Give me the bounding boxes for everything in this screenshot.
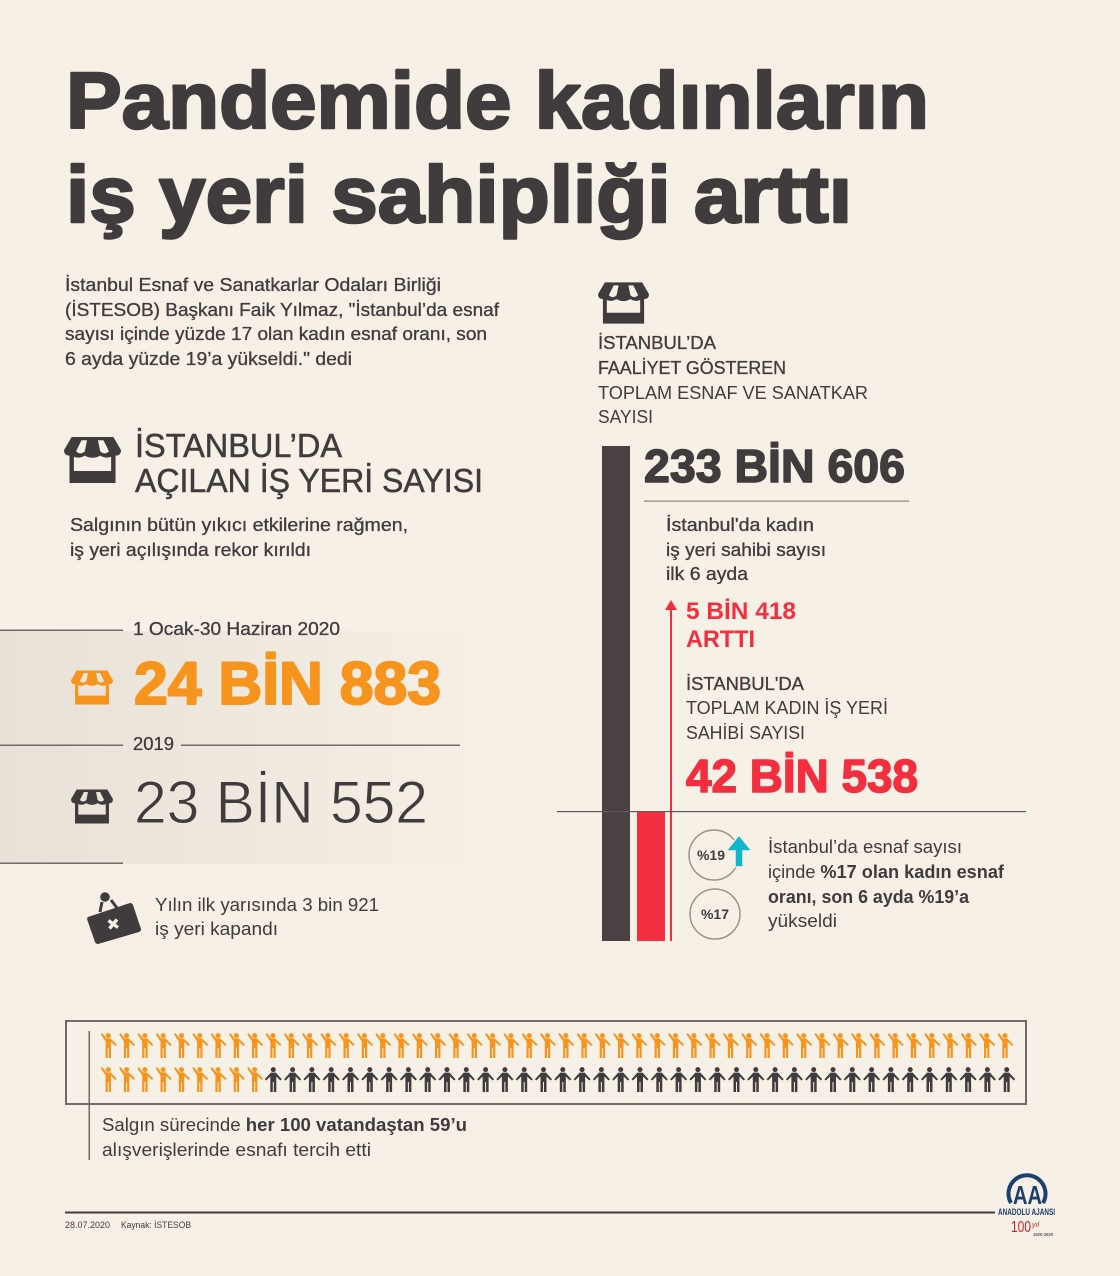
text: citizens note	[102, 1115, 467, 1160]
title	[66, 56, 929, 239]
heading: total tradesmen: İSTANBUL’DA	[598, 333, 716, 353]
text: women total label: SAHİBİ SAYISI	[686, 723, 805, 743]
heading: opened workplaces	[135, 427, 483, 499]
icon: closed briefcase	[87, 892, 141, 944]
label: 2020 period: 1 Ocak-30 Haziran 2020	[133, 619, 340, 639]
circle: 17 percent	[690, 889, 740, 939]
pictogram row 2 dark	[265, 1067, 1015, 1092]
text: ratio note: İstanbul’da esnaf sayısı	[768, 837, 962, 857]
bar: women	[637, 812, 665, 941]
subheading: iş yeri açılışında rekor kırıldı	[70, 540, 311, 560]
icon: orange shop	[71, 671, 113, 704]
logo: Anadolu Ajansi: ANADOLU AJANSI	[998, 1207, 1055, 1217]
text: women total label: TOPLAM KADIN İŞ YERİ	[686, 698, 888, 718]
pictogram row 2 orange	[101, 1067, 263, 1092]
text: women owners: iş yeri sahibi sayısı	[666, 540, 826, 560]
footer date and source: 28.07.2020	[65, 1220, 110, 1230]
subheading: Salgının bütün yıkıcı etkilerine rağmen,	[70, 515, 408, 535]
logo: Anadolu Ajansi: AA	[1013, 1180, 1042, 1210]
icon: cyan up arrow	[726, 835, 752, 867]
value: total: 233 BİN 606	[644, 440, 905, 492]
text: ratio note: yükseldi	[768, 911, 837, 931]
intro paragraph: (İSTESOB) Başkanı Faik Yılmaz, "İstanbul’da esnaf	[65, 300, 500, 320]
text: ratio note: oranı, son 6 ayda %19’a	[768, 887, 970, 907]
panel: comparison of openings	[0, 619, 510, 864]
logo: Anadolu Ajansi: yıl	[1031, 1222, 1039, 1229]
logo: Anadolu Ajansi	[998, 1175, 1055, 1237]
icon: dark shop	[71, 790, 113, 823]
icon: shop heading	[64, 437, 121, 483]
footer line	[65, 1212, 995, 1214]
heading: total tradesmen	[598, 333, 868, 427]
text: citizens note: alışverişlerinde esnafı tercih etti	[102, 1140, 371, 1160]
value: 2020: 24 BİN 883	[134, 650, 441, 717]
intro paragraph: İstanbul Esnaf ve Sanatkarlar Odaları Birliği	[65, 275, 441, 295]
heading: opened workplaces: İSTANBUL’DA	[135, 427, 342, 464]
bar: total	[602, 446, 630, 941]
value: increase: ARTTI	[686, 626, 755, 653]
text: ratio note	[768, 837, 1005, 931]
text: women total label	[686, 674, 888, 743]
text: women total label: İSTANBUL'DA	[686, 674, 804, 694]
circle: 19 percent: %19	[697, 847, 725, 863]
text: women owners: İstanbul'da kadın	[666, 515, 814, 535]
value: increase	[686, 598, 796, 653]
text: ratio note: içinde %17 olan kadın esnaf	[768, 862, 1005, 882]
value: women total: 42 BİN 538	[686, 750, 918, 802]
heading: total tradesmen: SAYISI	[598, 407, 653, 427]
closed workplaces note: Yılın ilk yarısında 3 bin 921	[155, 895, 379, 915]
text: women owners: ilk 6 ayda	[666, 564, 749, 584]
arrow: red increase	[665, 600, 677, 941]
closed workplaces note	[155, 895, 379, 939]
footer date and source: Kaynak: İSTESOB	[121, 1220, 191, 1230]
heading: total tradesmen: FAALİYET GÖSTEREN	[598, 358, 786, 378]
logo: Anadolu Ajansi: 1920-2020	[1033, 1232, 1053, 1237]
logo: Anadolu Ajansi: 100	[1011, 1219, 1031, 1236]
closed workplaces note: iş yeri kapandı	[155, 919, 278, 939]
text: women owners	[666, 515, 826, 584]
text: citizens note: Salgın sürecinde her 100 vatandaştan 59’u	[102, 1115, 467, 1135]
title: iş yeri sahipliği arttı	[66, 150, 852, 239]
heading: opened workplaces: AÇILAN İŞ YERİ SAYISI	[135, 462, 483, 499]
icon: shop right	[598, 282, 649, 324]
value: increase: 5 BİN 418	[686, 598, 796, 625]
subheading	[70, 515, 408, 560]
title: Pandemide kadınların	[66, 56, 929, 145]
intro paragraph: 6 ayda yüzde 19’a yükseldi." dedi	[65, 349, 352, 369]
intro paragraph	[65, 275, 500, 369]
circle: 17 percent: %17	[701, 906, 729, 922]
circle: 19 percent	[689, 830, 752, 880]
label: 2019: 2019	[133, 734, 174, 754]
intro paragraph: sayısı içinde yüzde 17 olan kadın esnaf oranı, son	[65, 324, 487, 344]
pictogram row 1	[101, 1033, 1014, 1058]
footer date and source	[65, 1220, 191, 1230]
panel: people pictogram	[66, 1021, 1026, 1160]
heading: total tradesmen: TOPLAM ESNAF VE SANATKAR	[598, 383, 868, 403]
value: 2019: 23 BİN 552	[134, 769, 428, 836]
